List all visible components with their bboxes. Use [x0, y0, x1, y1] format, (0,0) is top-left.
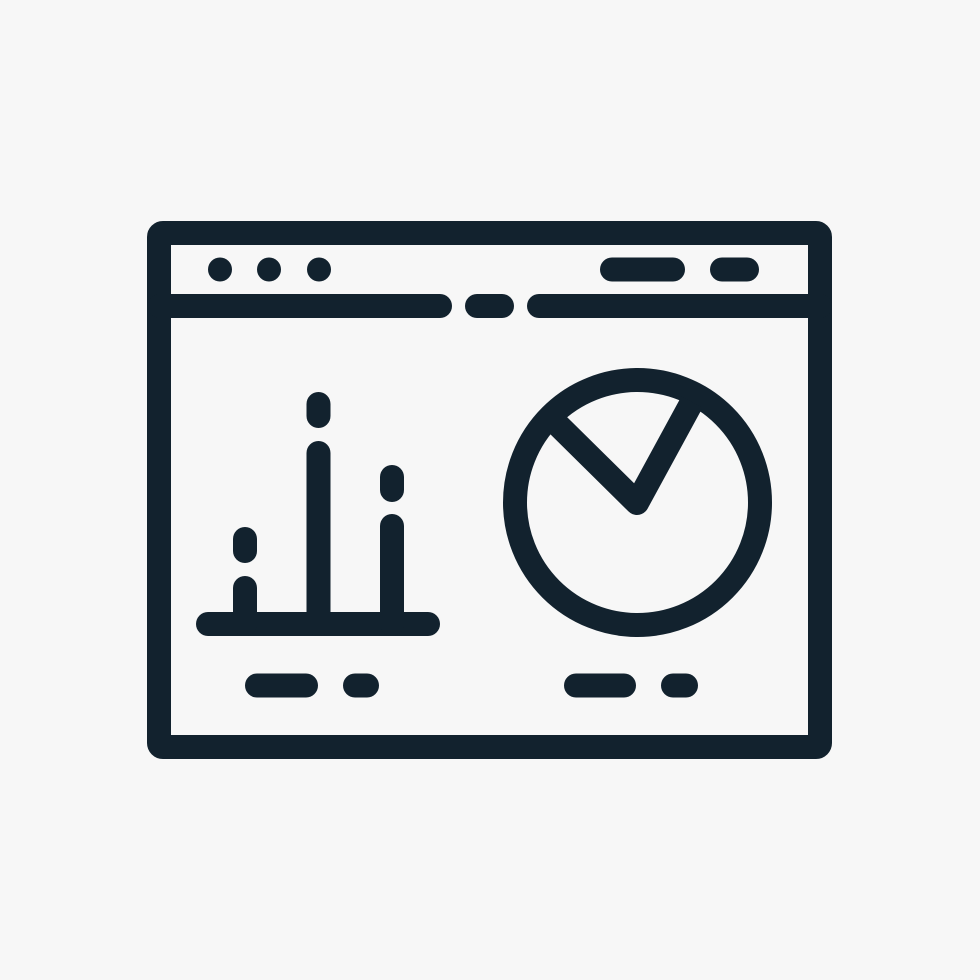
- toolbar separator: [160, 294, 820, 318]
- label pills under pie chart: [576, 674, 686, 698]
- window frame: [159, 233, 820, 747]
- window controls: dots: [220, 258, 319, 282]
- bar chart: [208, 404, 428, 624]
- pie chart: [515, 380, 760, 625]
- window controls: pills: [612, 258, 747, 282]
- label pills under bar chart: [257, 674, 367, 698]
